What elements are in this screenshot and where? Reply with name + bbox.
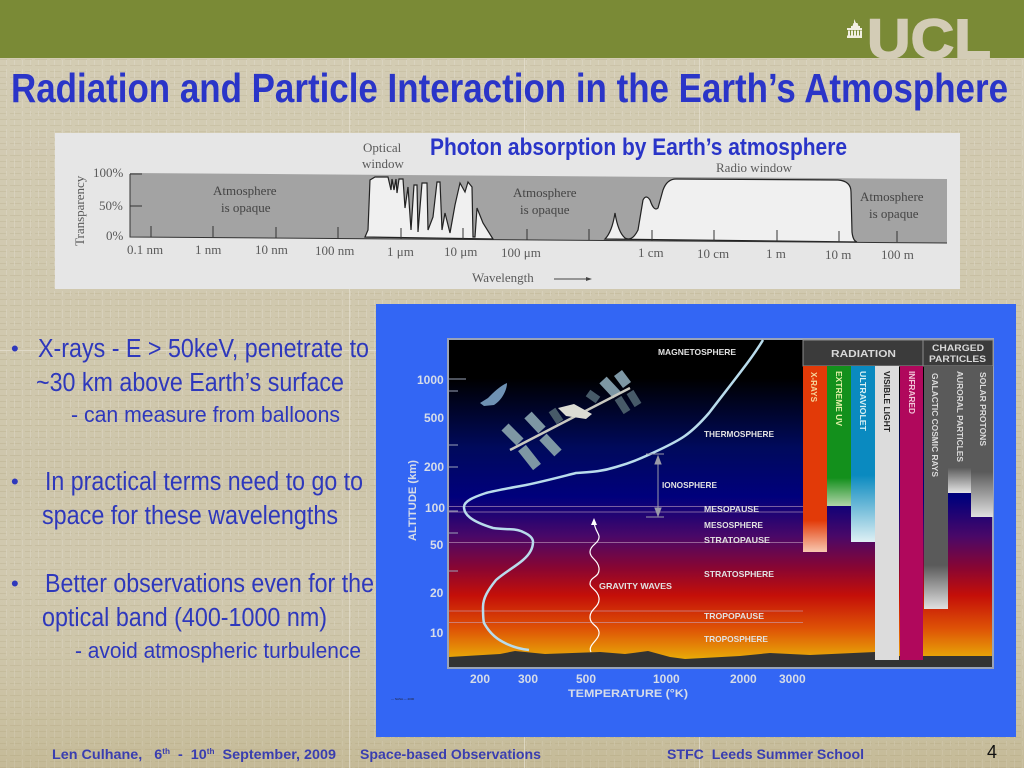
radio window (605, 179, 857, 242)
bar: infrared (900, 366, 923, 660)
charged particles header: PARTICLES (929, 354, 986, 365)
chart labels: 100 nm (315, 243, 354, 258)
footer: session: Space-based Observations (360, 746, 541, 762)
footer: school: STFC Leeds Summer School (667, 746, 864, 762)
bar: solar protons (971, 366, 993, 517)
footer: author and date: September, 2009 (215, 746, 336, 762)
atmosphere layer labels: STRATOSPHERE (704, 569, 774, 579)
chart labels: Radio window (716, 160, 793, 175)
axes (130, 174, 947, 243)
arrow: ionosphere range (646, 454, 664, 517)
temperature axis: TEMPERATURE (°K) (568, 688, 688, 700)
chart labels: Optical (363, 140, 402, 155)
panel: photon absorption chart (55, 133, 960, 289)
icon: space shuttle (480, 383, 507, 406)
chart labels: 1 μm (387, 244, 414, 259)
chart labels: 0% (106, 228, 124, 243)
atmosphere layer labels: THERMOSPHERE (704, 429, 774, 439)
bar: auroral particles: AURORAL PARTICLES (955, 371, 965, 462)
footer (52, 746, 864, 762)
charged particles header (923, 340, 993, 366)
chart labels: Transparency (72, 175, 87, 246)
text block: bullet points: Better observations even for the (45, 570, 374, 598)
arrow: wavelength (554, 278, 586, 280)
bar: ultraviolet (851, 366, 875, 542)
altitude axis: 500 (424, 411, 444, 425)
temperature axis: 3000 (779, 672, 806, 686)
temperature axis: 1000 (653, 672, 680, 686)
temperature axis: 2000 (730, 672, 757, 686)
text block: bullet points (11, 335, 374, 663)
bar: visible light: VISIBLE LIGHT (882, 371, 892, 433)
text block: bullet points: ~30 km above Earth’s surface (36, 369, 344, 397)
altitude axis: 1000 (417, 373, 444, 387)
chart labels: 50% (99, 198, 123, 213)
atmosphere layer labels: STRATOPAUSE (704, 535, 770, 545)
chart labels: 100% (93, 165, 124, 180)
temperature axis: 500 (576, 672, 596, 686)
chart labels: 100 m (881, 247, 914, 262)
atmosphere layer labels: MESOPAUSE (704, 504, 759, 514)
optical window (365, 177, 493, 239)
atmosphere layer labels: TROPOPAUSE (704, 611, 764, 621)
chart labels: window (362, 156, 404, 171)
opaque band (130, 173, 947, 243)
bar: visible light (875, 366, 899, 660)
chart labels: 10 m (825, 247, 851, 262)
text block: bullet points: • (11, 336, 19, 361)
atmosphere layer labels: MESOSPHERE (704, 520, 763, 530)
chart labels: is opaque (221, 200, 271, 215)
altitude axis: ALTITUDE (km) (407, 460, 419, 541)
panel: atmosphere diagram (376, 304, 1016, 737)
footer: author and date: Len Culhane, 6 (52, 746, 159, 762)
chart labels: 100 μm (501, 245, 541, 260)
atmosphere layer labels: GRAVITY WAVES (599, 581, 672, 591)
bar: solar protons: SOLAR PROTONS (978, 372, 988, 446)
temperature curve (464, 340, 763, 650)
chart labels: is opaque (520, 202, 570, 217)
chart labels: Atmosphere (513, 185, 577, 200)
footer: author and date: - 10 (170, 746, 207, 762)
altitude axis: 100 (425, 501, 445, 515)
text block: bullet points: - avoid atmospheric turbulence (75, 638, 361, 663)
text block: bullet points: space for these wavelengths (42, 502, 338, 530)
atmosphere layer labels: MAGNETOSPHERE (658, 347, 736, 357)
bar: extreme uv: EXTREME UV (834, 371, 844, 426)
atmosphere layer labels: TROPOSPHERE (704, 634, 768, 644)
altitude lines (449, 506, 803, 622)
charged particles header: CHARGED (932, 343, 984, 354)
temperature axis: 200 (470, 672, 490, 686)
radiation header: RADIATION (831, 349, 896, 360)
text block: bullet points: optical band (400-1000 nm) (42, 604, 327, 632)
altitude axis: 200 (424, 460, 444, 474)
bar: auroral particles (948, 366, 971, 493)
chart labels: 1 nm (195, 242, 221, 257)
gravity wave arrow (590, 518, 599, 652)
text block: bullet points: In practical terms need to go to (45, 468, 363, 496)
icon: space station (505, 373, 638, 467)
atmosphere layer labels: IONOSPHERE (662, 480, 717, 490)
mountains (449, 651, 992, 667)
chart labels: is opaque (869, 206, 919, 221)
bar: ultraviolet: ULTRAVIOLET (858, 371, 868, 432)
altitude axis: 50 (430, 538, 444, 552)
radiation header (803, 340, 923, 366)
chart labels: 10 nm (255, 242, 288, 257)
bar: infrared: INFRARED (907, 371, 917, 414)
page number: 4 (987, 742, 997, 762)
UCL logo: UCL (867, 7, 991, 70)
text block: bullet points: • (11, 469, 19, 494)
text block: bullet points: X-rays - E > 50keV, penetrate to (38, 335, 369, 363)
footer: author and date: th (162, 747, 170, 756)
chart labels: 1 cm (638, 245, 664, 260)
chart labels: 0.1 nm (127, 242, 163, 257)
plot frame (448, 339, 993, 668)
altitude axis: 20 (430, 586, 444, 600)
temperature axis (470, 672, 806, 700)
altitude axis (407, 373, 466, 640)
chart labels: Atmosphere (213, 183, 277, 198)
bar: galactic cosmic rays: GALACTIC COSMIC RAYS (930, 373, 940, 477)
bar: extreme uv (827, 366, 851, 506)
footer: author and date: th (207, 747, 215, 756)
chart labels: 1 m (766, 246, 786, 261)
tiny credit: — NASA — 2000 (391, 697, 415, 701)
chart labels (72, 140, 924, 285)
text block: bullet points: - can measure from balloons (71, 402, 340, 427)
bar: x-rays (803, 366, 827, 552)
icon: portico (847, 19, 862, 38)
temperature axis: 300 (518, 672, 538, 686)
bar: x-rays: X-RAYS (809, 372, 819, 402)
chart labels: 10 cm (697, 246, 729, 261)
chart labels: Wavelength (472, 270, 534, 285)
bar: galactic cosmic rays (924, 366, 948, 609)
chart labels: Atmosphere (860, 189, 924, 204)
chart labels: 10 μm (444, 244, 477, 259)
header band (0, 0, 1024, 58)
text block: bullet points: • (11, 571, 19, 596)
panel heading: photon absorption: Photon absorption by Earth’s atmosphere (430, 134, 847, 161)
atmosphere layer labels (599, 347, 774, 644)
altitude axis: 10 (430, 626, 444, 640)
